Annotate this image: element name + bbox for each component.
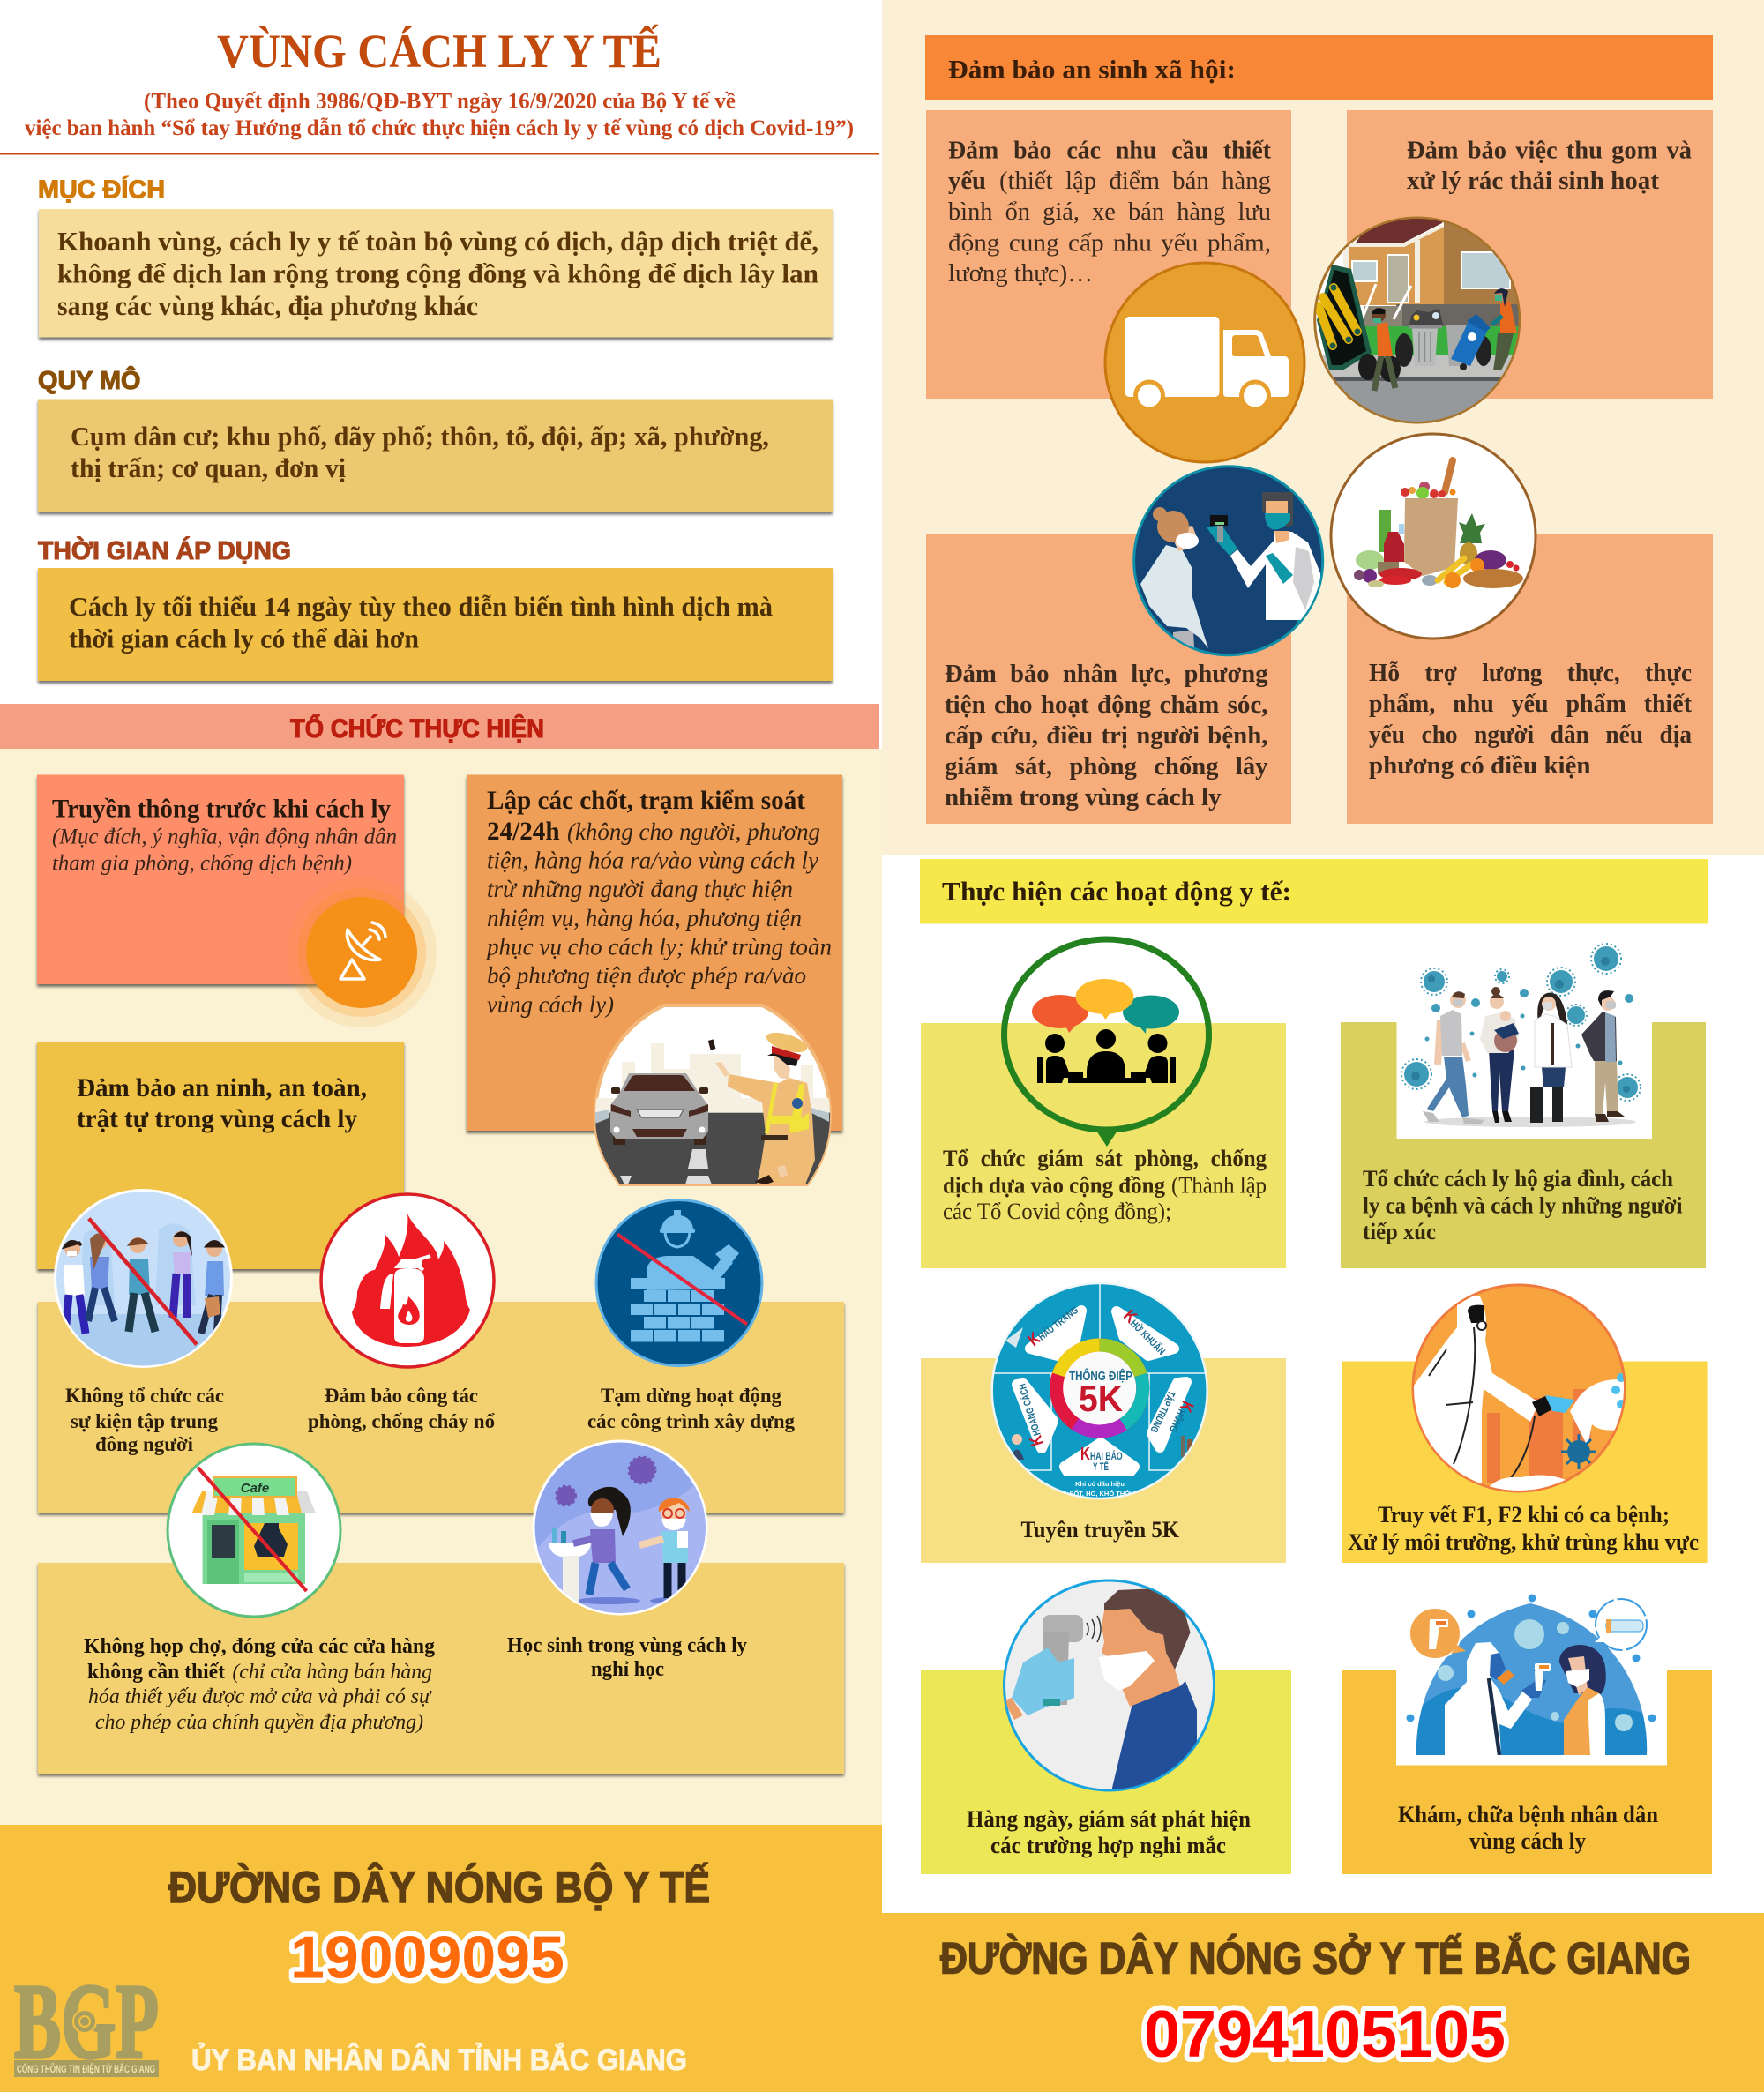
picture: traffic police stopping a car [591, 1005, 838, 1188]
garbage truck arm [1317, 265, 1372, 370]
panel: an ninh trật tự: Đảm bảo an ninh, an toàn, [77, 1073, 367, 1102]
picture: garbage collection [1314, 215, 1523, 427]
panel: lập các chốt: vùng cách ly) [487, 991, 614, 1018]
panel: ba biện pháp hạn chế: sự kiện tập trung [71, 1410, 218, 1432]
icon: 5K message wheel [992, 1283, 1208, 1498]
picture: medical examination [1406, 1595, 1656, 1755]
wheel footnote: SỐT, HO, KHÓ THỞ [1069, 1489, 1131, 1498]
girl [573, 1487, 631, 1595]
text: thời gian: Cách ly tối thiểu 14 ngày tùy theo diễn biến tình hình dịch mà [69, 592, 773, 622]
panel: nhu cầu thiết yếu: động cung cấp nhu yếu phẩm, [948, 230, 1271, 258]
section: quy mô [38, 365, 833, 512]
icon: community meeting bubble [1004, 939, 1208, 1147]
panel: giám sát cộng đồng: Tổ chức giám sát phòng, chống [943, 1146, 1267, 1171]
picture: temperature screening [1004, 1580, 1214, 1792]
panel: truyền thông: Truyền thông trước khi cách ly [52, 794, 391, 824]
icon: cafe closed [168, 1444, 340, 1617]
wheel labels: KHOẢNG CÁCH [1011, 1382, 1048, 1448]
wheel labels: KHAI BÁO [1080, 1445, 1123, 1464]
panel: an ninh trật tự [37, 1042, 404, 1269]
panel: truy vết: Xử lý môi trường, khử trùng khu vực [1348, 1529, 1699, 1555]
panel: ba biện pháp hạn chế: các công trình xây dựng [587, 1410, 795, 1432]
panel: nhân lực: Đảm bảo nhân lực, phương [945, 661, 1268, 688]
panel: ba biện pháp hạn chế: phòng, chống cháy nổ [308, 1410, 495, 1432]
panel: thu gom rác: Đảm bảo việc thu gom và [1407, 137, 1692, 164]
patient [1559, 1645, 1606, 1694]
publisher: ỦY BAN NHÂN DÂN TỈNH BẮC GIANG [191, 2043, 687, 2077]
woman with baby [1480, 987, 1519, 1123]
logo: CỔNG THÔNG TIN ĐIỆN TỬ BẮC GIANG [17, 2064, 155, 2075]
panel: ba biện pháp hạn chế: Không tổ chức các [65, 1385, 224, 1407]
panel: tuyên truyền 5K [921, 1358, 1286, 1563]
center ring: 5K [1079, 1378, 1123, 1419]
person in grey shirt [1423, 991, 1484, 1124]
text: thời gian [69, 592, 773, 654]
icon: kids washing hands [534, 1441, 706, 1614]
panel: giám sát hàng ngày: các trường hợp nghi mắc [990, 1833, 1226, 1858]
test tube bubble [1595, 1599, 1647, 1650]
band heading: tổ chức thực hiện [0, 704, 879, 749]
panel: họp chợ và học sinh: Học sinh trong vùng cách ly [507, 1634, 747, 1657]
person 5 [201, 1241, 224, 1334]
panel: truyền thông [37, 774, 404, 984]
panel: lập các chốt: bộ phương tiện được phép ra/vào [487, 962, 806, 989]
center ring [1057, 1345, 1143, 1431]
person 1 [64, 1241, 86, 1334]
panel: giám sát cộng đồng: dịch dựa vào cộng đồng [943, 1173, 1165, 1199]
title block [25, 24, 854, 140]
wheel labels: KHẨU TRANG [1025, 1300, 1081, 1350]
panel: thu gom rác [1347, 110, 1713, 399]
panel: khám chữa bệnh [1342, 1670, 1712, 1874]
panel: cách ly hộ gia đình: Tổ chức cách ly hộ gia đình, cách [1363, 1166, 1674, 1192]
person 3 [129, 1237, 155, 1332]
wheel footnote: Khi có dấu hiệu [1075, 1480, 1125, 1488]
footer right [882, 1913, 1764, 2092]
panel: khám chữa bệnh: Khám, chữa bệnh nhân dân [1398, 1802, 1659, 1827]
worker 2 [1492, 288, 1517, 370]
icon: crowd prohibited [55, 1191, 231, 1367]
panel: nhu cầu thiết yếu: lương thực)… [948, 260, 1093, 288]
section: thời gian áp dụng [38, 535, 833, 681]
logo [14, 1962, 159, 2081]
nurse [1140, 507, 1208, 648]
panel: lập các chốt: (không cho người, phương [567, 818, 820, 845]
dome nodes [1406, 1595, 1656, 1722]
panel: giám sát hàng ngày: Hàng ngày, giám sát phát hiện [967, 1806, 1252, 1832]
viruses [557, 1457, 655, 1505]
doctor in protective suit [1445, 1642, 1532, 1755]
heading: thời gian áp dụng: THỜI GIAN ÁP DỤNG [38, 535, 291, 565]
panel: lập các chốt: nhiệm vụ, hàng hóa, phương tiện [487, 905, 802, 931]
car [610, 1073, 708, 1145]
left cream background [0, 749, 882, 1825]
panel: họp chợ và học sinh [38, 1563, 844, 1774]
wheel labels: Y TẾ [1093, 1461, 1109, 1473]
panel: nhu cầu thiết yếu: bình ổn giá, xe bán hàng lưu [948, 198, 1271, 226]
panel: cách ly hộ gia đình: tiếp xúc [1363, 1219, 1436, 1244]
title: VÙNG CÁCH LY Y TẾ [217, 24, 662, 78]
panel: hỗ trợ lương thực: phẩm, nhu yếu phẩm thiết [1369, 691, 1693, 718]
header bar: hoạt động y tế [920, 859, 1708, 924]
wheel labels: KHÔNG [1165, 1398, 1197, 1437]
box: quy mô [38, 399, 833, 512]
text: thời gian: thời gian cách ly có thể dài hơn [69, 624, 419, 654]
awning [192, 1491, 316, 1515]
panel: an ninh trật tự: trật tự trong vùng cách ly [77, 1104, 357, 1133]
picture: contact tracing and disinfection [1411, 1285, 1627, 1499]
heading: quy mô: QUY MÔ [38, 365, 141, 395]
panel: giám sát hàng ngày [921, 1670, 1291, 1874]
panel: nhân lực: nhiễm trong vùng cách ly [945, 784, 1222, 811]
meeting figures [1037, 1029, 1176, 1083]
panel: nhân lực [926, 534, 1291, 824]
right cream background [882, 0, 1764, 855]
picture: groceries [1331, 434, 1536, 639]
wheel footnote [1069, 1480, 1131, 1498]
panel: ba biện pháp hạn chế: Đảm bảo công tác [325, 1385, 478, 1407]
panel: hỗ trợ lương thực [1347, 534, 1713, 824]
panel: họp chợ và học sinh: (chỉ cửa hàng bán hàng [232, 1661, 432, 1684]
panel: lập các chốt: phục vụ cho cách ly; khử trùng toàn [485, 934, 832, 960]
panel: họp chợ và học sinh: cho phép của chính quyền địa phương) [95, 1711, 423, 1734]
panel: nhu cầu thiết yếu [926, 110, 1291, 399]
picture: people with viruses [1401, 944, 1641, 1127]
doctor [1207, 492, 1320, 661]
text: quy mô: thị trấn; cơ quan, đơn vị [71, 453, 347, 483]
heading: mục đích: MỤC ĐÍCH [38, 175, 165, 205]
panel: giám sát cộng đồng: (Thành lập [1171, 1173, 1267, 1199]
panel: khám chữa bệnh: vùng cách ly [1469, 1828, 1586, 1854]
panel: họp chợ và học sinh: hóa thiết yếu được mở cửa và phải có sự [88, 1685, 432, 1708]
panel: cách ly hộ gia đình [1341, 1022, 1706, 1268]
panel: nhân lực: cấp cứu, điều trị người bệnh, [945, 722, 1268, 750]
worker 1 [1358, 308, 1401, 391]
icon: satellite dish [287, 878, 437, 1027]
icon: construction stopped [596, 1200, 762, 1366]
text: mục đích [57, 227, 818, 321]
box: mục đích [39, 209, 833, 337]
box: thời gian [38, 568, 833, 681]
officer [708, 1028, 815, 1184]
panel: họp chợ và học sinh: Không họp chợ, đóng cửa các cửa hàng [84, 1635, 435, 1658]
panel: truy vết [1342, 1362, 1708, 1563]
cafe sign: Cafe [241, 1481, 269, 1496]
logo: BGP [14, 1962, 159, 2081]
panel: lập các chốt: tiện, hàng hóa ra/vào vùng cách ly [487, 848, 818, 874]
panel: cách ly hộ gia đình: ly ca bệnh và cách ly những người [1363, 1193, 1683, 1219]
footer left [0, 1825, 882, 2092]
icon: fire and extinguisher [321, 1194, 494, 1367]
icon: truck [1105, 263, 1304, 462]
panel: hỗ trợ lương thực: Hỗ trợ lương thực, thực [1369, 660, 1692, 687]
panel: tuyên truyền 5K: Tuyên truyền 5K [1021, 1517, 1180, 1543]
panel: thu gom rác: xử lý rác thải sinh hoạt [1407, 168, 1660, 195]
wheel labels: KHỬ KHUẨN [1119, 1306, 1172, 1358]
panel: giám sát cộng đồng [921, 1023, 1286, 1268]
text: mục đích: sang các vùng khác, địa phương khác [57, 291, 478, 321]
woman in white coat [1530, 993, 1572, 1123]
band heading: tổ chức thực hiện: TỔ CHỨC THỰC HIỆN [290, 714, 544, 743]
panel: nhu cầu thiết yếu: yếu [948, 168, 986, 195]
text: quy mô [71, 422, 769, 483]
subtitle: việc ban hành “Sổ tay Hướng dẫn tổ chức thực hiện cách ly y tế vùng có dịch Covid-19”) [25, 116, 854, 140]
person 2 [88, 1233, 115, 1321]
panel: nhu cầu thiết yếu: Đảm bảo các nhu cầu thiết [948, 137, 1272, 164]
subtitle: (Theo Quyết định 3986/QĐ-BYT ngày 16/9/2020 của Bộ Y tế về [144, 90, 736, 113]
panel: nhân lực: tiện cho hoạt động chăm sóc, [945, 691, 1268, 719]
speech bubbles [1032, 979, 1179, 1034]
panel: lập các chốt: Lập các chốt, trạm kiểm soát [487, 786, 805, 815]
boy [639, 1498, 690, 1598]
header bar: an sinh xã hội: Đảm bảo an sinh xã hội: [948, 55, 1236, 85]
wheel labels: TẬP TRUNG [1147, 1389, 1177, 1434]
panel: nhu cầu thiết yếu: (thiết lập điểm bán hàng [999, 168, 1271, 195]
hotline number: 0794105105 [1144, 1997, 1506, 2071]
sink [549, 1528, 591, 1602]
header bar: hoạt động y tế: Thực hiện các hoạt động y tế: [942, 876, 1291, 907]
panel: truy vết: Truy vết F1, F2 khi có ca bệnh; [1378, 1502, 1670, 1528]
cafe sign [213, 1477, 296, 1497]
panel: ba biện pháp hạn chế [38, 1302, 844, 1513]
panel: giám sát cộng đồng: các Tổ Covid cộng đồng); [943, 1199, 1171, 1224]
subtitle [25, 90, 854, 140]
thermometer bubble [1409, 1608, 1466, 1659]
panel: truyền thông: tham gia phòng, chống dịch bệnh) [52, 850, 352, 876]
panel: ba biện pháp hạn chế: Tạm dừng hoạt động [601, 1385, 781, 1407]
text: mục đích: không để dịch lan rộng trong cộng đồng và không để dịch lây lan [57, 258, 818, 288]
panel: truyền thông: (Mục đích, ý nghĩa, vận động nhân dân [52, 824, 397, 849]
panel: họp chợ và học sinh: nghỉ học [591, 1658, 664, 1681]
petals [1017, 1311, 1186, 1471]
panel: ba biện pháp hạn chế: đông người [95, 1433, 194, 1455]
panel: hỗ trợ lương thực: phương có điều kiện [1369, 752, 1591, 780]
wheel labels [1011, 1300, 1197, 1473]
panel: lập các chốt: trừ những người đang thực hiện [487, 876, 793, 902]
header bar: an sinh xã hội [925, 35, 1713, 100]
text: mục đích: Khoanh vùng, cách ly y tế toàn bộ vùng có dịch, dập dịch triệt để, [57, 227, 818, 257]
panel: nhân lực: giám sát, phòng chống lây [945, 753, 1268, 781]
text: quy mô: Cụm dân cư; khu phố, dãy phố; thôn, tổ, đội, ấp; xã, phường, [71, 422, 769, 452]
center ring: THÔNG ĐIỆP [1069, 1368, 1132, 1384]
panel: họp chợ và học sinh: không cần thiết [87, 1661, 225, 1684]
panel: lập các chốt: 24/24h [487, 817, 560, 846]
hotline number: 19009095 [290, 1924, 564, 1991]
panel: lập các chốt [467, 774, 842, 1131]
hotline heading: ĐƯỜNG DÂY NÓNG BỘ Y TẾ [168, 1862, 710, 1912]
person 4 [173, 1231, 192, 1318]
section: mục đích [38, 175, 833, 337]
viruses [1401, 944, 1641, 1101]
man in dark jacket [1581, 990, 1625, 1122]
trash cans [1395, 309, 1491, 370]
panel: hỗ trợ lương thực: yếu cho người dân nếu địa [1369, 721, 1692, 749]
picture: temperature check [1134, 467, 1323, 661]
